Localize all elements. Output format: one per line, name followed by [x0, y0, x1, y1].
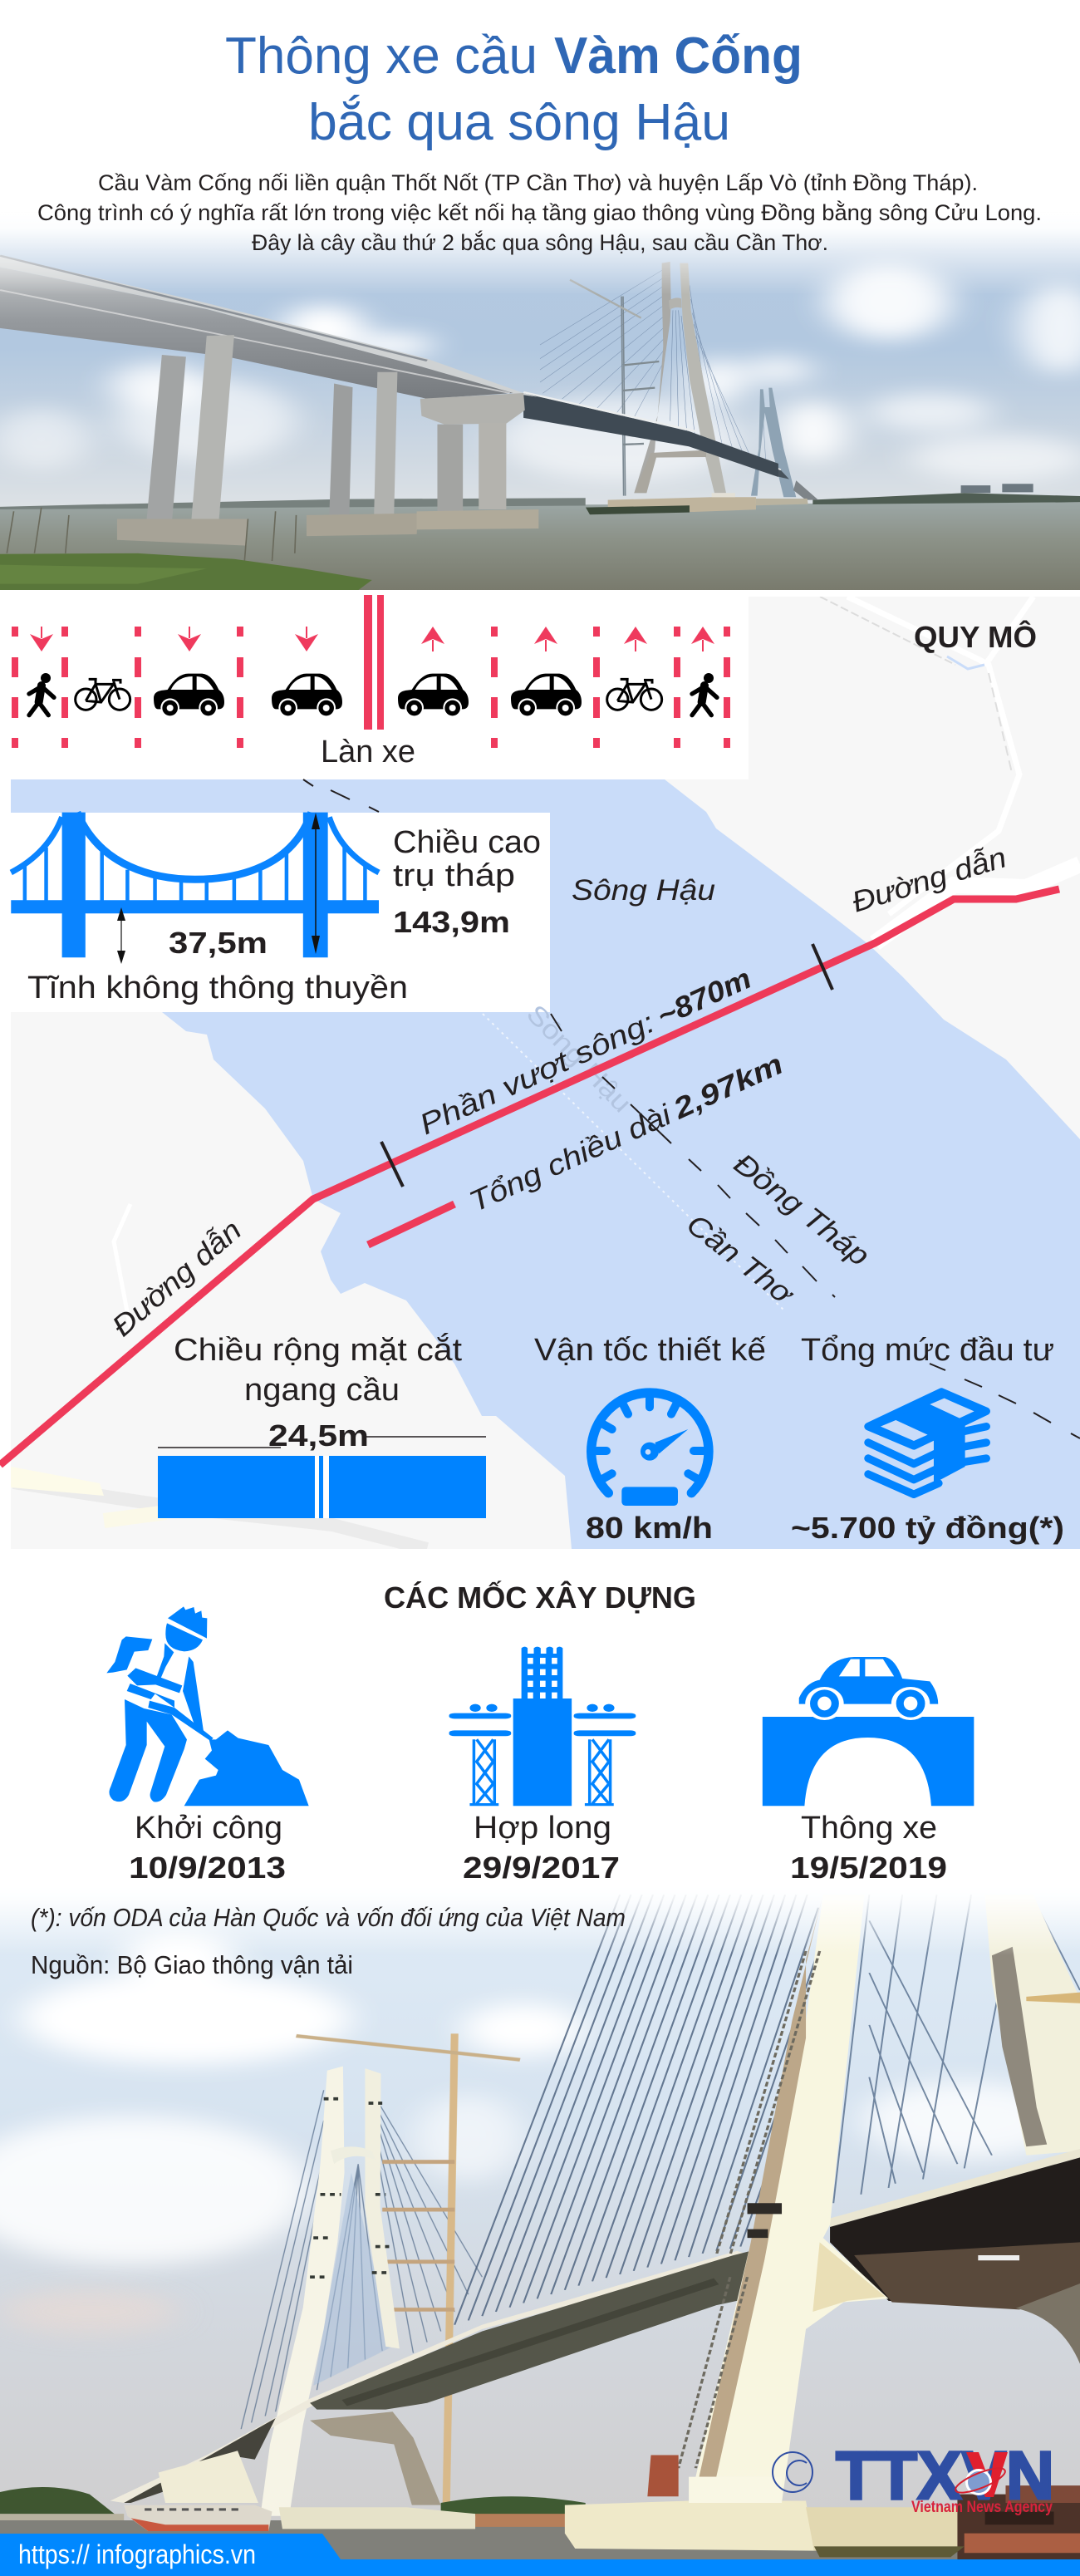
label: tower height: trụ tháp: [393, 858, 515, 893]
deck to main tower: [523, 393, 778, 477]
bottom url bar: https:// infographics.vn: [18, 2539, 256, 2569]
small tower cables: [241, 2090, 482, 2429]
value: clearance: 37,5m: [169, 926, 268, 960]
car 2: [272, 674, 342, 717]
crane: [621, 297, 626, 496]
icon: car on arch bridge: [763, 1657, 974, 1806]
map label: Dong Thap: Đồng Tháp: [728, 1148, 876, 1272]
icon: bridge tower under construction: [449, 1647, 636, 1806]
arrow: tower height: [312, 813, 320, 954]
lane dashes: [12, 627, 730, 748]
cross-section width block: 24,5m: [268, 1418, 369, 1453]
milestone: opening to traffic: 19/5/2019: [790, 1851, 947, 1885]
small tower legs: [260, 2067, 345, 2516]
main tower cables through gap: [670, 310, 695, 438]
design speed block: [534, 1333, 766, 1545]
milestone: opening to traffic: [763, 1657, 974, 1885]
intro text: Đây là cây cầu thứ 2 bắc qua sông Hậu, sau cầu Cần Thơ.: [252, 229, 828, 255]
border dashed line: [303, 779, 1080, 1438]
design speed block: Vận tốc thiết kế: [534, 1333, 766, 1368]
title: Thông xe cầu: [225, 27, 538, 85]
icon: stack of money: [868, 1392, 986, 1494]
investment block: [791, 1333, 1064, 1545]
cross-section bar: [158, 1456, 486, 1518]
small tower base: [279, 2507, 475, 2529]
heading: scale: QUY MÔ: [914, 619, 1037, 654]
bicycle right: [607, 679, 662, 710]
milestone: groundbreaking: 10/9/2013: [129, 1851, 286, 1885]
map label: approach road SW: Đường dẫn: [106, 1214, 248, 1343]
icon: speedometer: [592, 1393, 709, 1506]
cross-section width block: [158, 1332, 486, 1518]
bottom url bar: [0, 2534, 1080, 2576]
label: lanes: Làn xe: [321, 735, 415, 769]
intro text: [37, 170, 1042, 255]
map label: Can Tho: Cần Thơ: [680, 1208, 801, 1312]
big tower: [689, 1895, 889, 2503]
right side cables: [833, 1895, 1080, 2203]
pedestrian right: [692, 673, 717, 715]
investment block: ~5.700 tỷ đồng(*): [791, 1511, 1064, 1545]
design speed block: 80 km/h: [586, 1511, 713, 1545]
near deck: [0, 256, 538, 397]
milestone: span closure: 29/9/2017: [463, 1851, 620, 1885]
label: clearance: Tĩnh không thông thuyền: [27, 971, 408, 1005]
copyright mark: [773, 2452, 812, 2492]
pier 2: [329, 383, 352, 515]
car 1: [154, 674, 224, 717]
map label: total length: Tổng chiều dài: [464, 1099, 677, 1218]
title: [225, 27, 803, 151]
big tower base: [565, 2500, 814, 2551]
footnote: (*): vốn ODA của Hàn Quốc và vốn đối ứng của Việt Nam: [31, 1903, 626, 1932]
water: [0, 502, 1080, 595]
map faint label: Song Hau: Sông Hậu: [521, 999, 637, 1118]
lane diagram: [12, 595, 730, 769]
red V and globe: [953, 2452, 1008, 2497]
ladder: [679, 1951, 820, 2468]
intro text: Công trình có ý nghĩa rất lớn trong việc kết nối hạ tầng giao thông vùng Đồng bằng sông Cửu Long.: [37, 199, 1042, 225]
bicycle left: [76, 679, 130, 710]
title: Vàm Cống: [554, 27, 803, 85]
second tower: [751, 388, 796, 497]
crane: [446, 2033, 454, 2503]
source: Nguồn: Bộ Giao thông vận tải: [31, 1950, 353, 1979]
river crossing tick marks: [381, 944, 832, 1187]
river Hau: [11, 779, 1080, 1549]
map label: total length: [464, 1048, 788, 1218]
far shore: [0, 498, 586, 509]
main tower left leg: [634, 262, 671, 493]
main cable fan: [454, 1895, 820, 2325]
map background: [11, 597, 1080, 1549]
white panel behind bridge profile: [0, 813, 550, 1012]
boat: [124, 2505, 272, 2531]
right deck: [830, 2149, 1080, 2227]
reeds: [7, 508, 297, 561]
logo: TTXVN: TTXVN: [836, 2438, 1054, 2514]
second tower cables: [758, 399, 789, 476]
pier 1: [147, 355, 186, 519]
grass bank: [0, 553, 372, 590]
car 3: [398, 674, 469, 717]
arrow: clearance: [117, 907, 125, 964]
milestone: groundbreaking: [106, 1606, 309, 1885]
total length red marker: [368, 1204, 454, 1245]
cross-section width block: Chiều rộng mặt cắt: [174, 1332, 462, 1368]
centre double line: [364, 595, 384, 730]
heading: construction milestones: CÁC MỐC XÂY DỰNG: [384, 1580, 696, 1615]
title: bắc qua sông Hậu: [308, 94, 730, 151]
milestone: opening to traffic: Thông xe: [801, 1811, 937, 1846]
white river centre line: [483, 1014, 785, 1311]
map label: river section length: [415, 962, 756, 1141]
land roads: [11, 597, 1080, 1549]
intro text: Cầu Vàm Cống nối liền quận Thốt Nốt (TP Cần Thơ) và huyện Lấp Vò (tỉnh Đồng Tháp).: [98, 170, 978, 195]
cross-section width block: ngang cầu: [244, 1373, 400, 1408]
bottom photo: cable-stayed towers: [0, 1885, 1080, 2576]
logo: TTXVN: Vietnam News Agency: [911, 2499, 1053, 2516]
map label: Song Hau: Sông Hậu: [572, 874, 715, 907]
label: tower height: 143,9m: [393, 905, 510, 939]
map label: total length: 2,97km: [668, 1048, 788, 1126]
label: tower height: [393, 825, 541, 939]
pier 3: [420, 393, 525, 425]
icon: worker digging: [106, 1606, 309, 1806]
label: tower height: Chiều cao: [393, 825, 541, 860]
far deck: [778, 469, 789, 479]
ships at right: [957, 2495, 1080, 2559]
main tower bases: [608, 497, 756, 512]
small tower portal and legs: [310, 2411, 441, 2505]
cables of main tower: [540, 268, 754, 463]
bridge route line: [0, 889, 1059, 1465]
deck: [110, 2251, 751, 2503]
water, shore: [0, 2520, 957, 2559]
map label: river section length: ~870m: [652, 962, 756, 1033]
car 4: [511, 674, 582, 717]
investment block: Tổng mức đầu tư: [801, 1333, 1054, 1368]
white panel behind lanes: [0, 590, 749, 779]
milestone: span closure: [449, 1647, 636, 1885]
bridge profile diagram: [11, 813, 541, 1005]
pedestrian left: [29, 673, 54, 715]
second big tower: [985, 1895, 1080, 2156]
map label: approach road NE: Đường dẫn: [848, 841, 1010, 919]
map label: river section length: Phần vượt sông:: [415, 1006, 660, 1141]
milestone: groundbreaking: Khởi công: [135, 1811, 282, 1846]
suspension bridge icon: [11, 813, 379, 957]
top photo: Vam Cong bridge from the river bank: [0, 212, 1080, 595]
milestone: span closure: Hợp long: [474, 1811, 611, 1846]
main tower right leg and beams: [669, 297, 682, 310]
direction arrows: [30, 627, 714, 651]
